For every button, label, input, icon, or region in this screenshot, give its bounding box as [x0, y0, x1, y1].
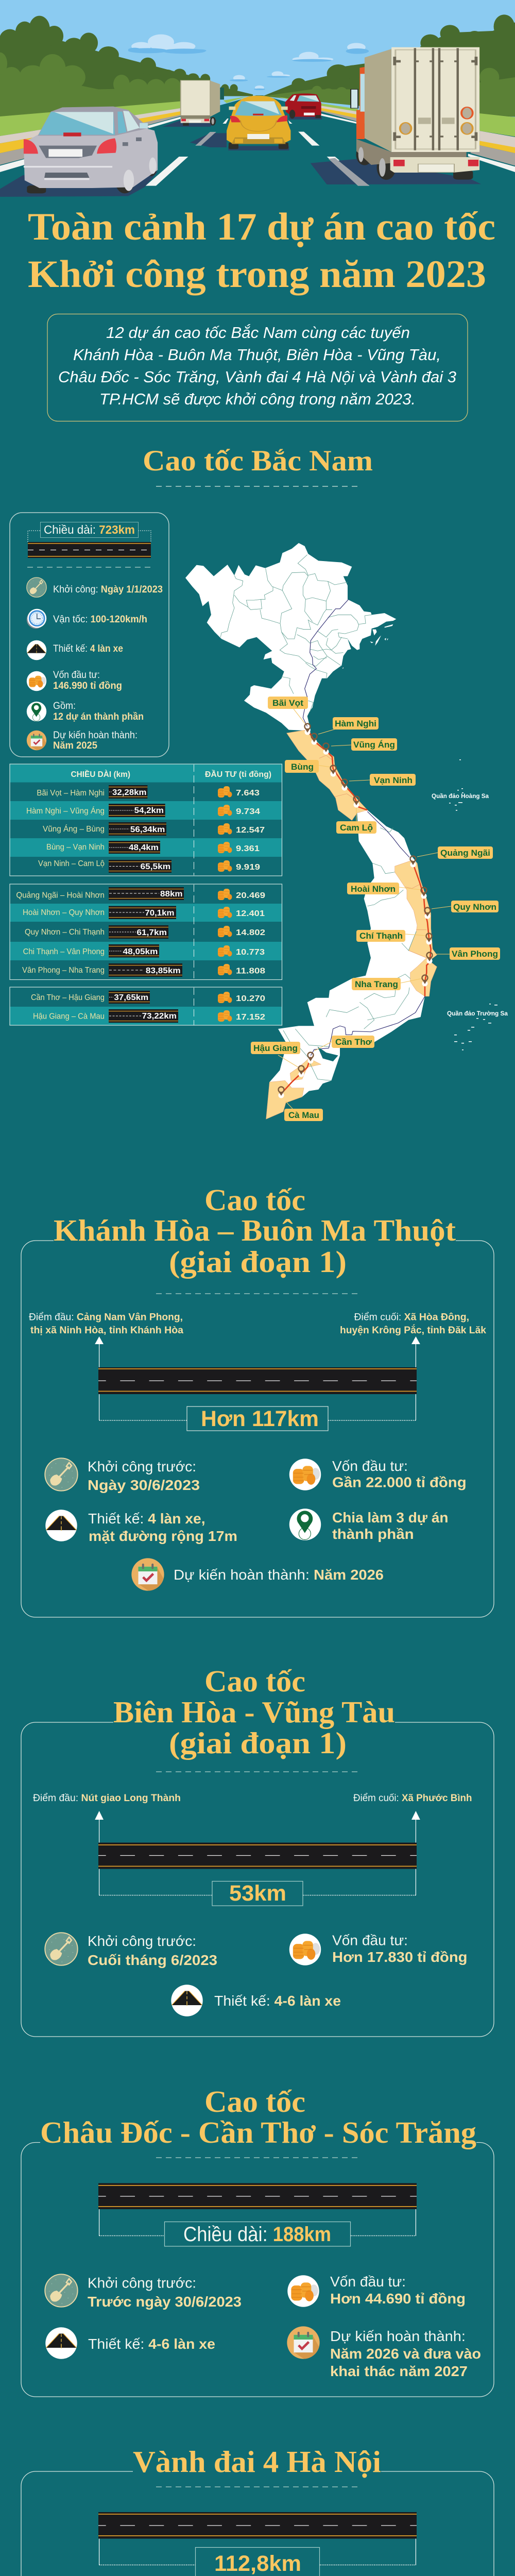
item: start: Trước ngày 30/6/2023 [88, 2294, 242, 2310]
table group 1: Vạn Ninh – Cam Lộ [38, 859, 105, 868]
dimension lines [99, 2538, 416, 2565]
item: investment [27, 670, 122, 691]
label: Quần đảo Hoàng Sa: Quần đảo Hoàng Sa [432, 792, 489, 800]
road [98, 2512, 417, 2539]
length box: Hơn 117km [201, 1406, 319, 1431]
heading: Châu Đốc - Cần Thơ - Sóc Trăng: Châu Đốc - Cần Thơ - Sóc Trăng [40, 2115, 476, 2149]
investment column: 7.643 [236, 789, 260, 798]
item: design: Thiết kế: 4 làn xe [53, 643, 123, 654]
road [98, 1367, 417, 1394]
panel: Khánh Hòa - Buôn Ma Thuột [21, 1241, 494, 1617]
arrows and dimension lines [95, 1336, 420, 1420]
map labels: Quy Nhơn [453, 902, 496, 912]
item: start [45, 1458, 200, 1493]
item: speed [27, 609, 147, 629]
item: completion [131, 1558, 384, 1591]
length bars: 56,34km [130, 825, 165, 834]
item: investment: Gần 22.000 tỉ đồng [332, 1475, 467, 1490]
big truck [351, 47, 479, 180]
road [98, 2183, 417, 2209]
map: central and south [266, 728, 437, 1119]
length label: Chiều dài: 723km [44, 523, 135, 536]
length bars: 83,85km [146, 967, 181, 975]
investment column: 9.919 [236, 863, 260, 872]
map labels: Nha Trang [355, 979, 398, 989]
panel: Châu Đốc - Cần Thơ - Sóc Trăng [21, 2142, 494, 2397]
start point: thị xã Ninh Hòa, tỉnh Khánh Hòa [30, 1325, 183, 1336]
item: design [45, 1510, 237, 1544]
item: completion: Năm 2026 và đưa vào [330, 2346, 481, 2362]
road [98, 1842, 417, 1869]
intro text box: 12 dự án cao tốc Bắc Nam cùng các tuyến [106, 324, 410, 342]
item: start: Khởi công trước: [88, 1933, 196, 1949]
table group 1: ĐẦU TƯ (tỉ đồng) [205, 769, 271, 779]
heading: Khánh Hòa - Buôn Ma Thuột [54, 1183, 456, 1279]
heading: Khánh Hòa - Buôn Ma Thuột: (giai đoạn 1) [169, 1245, 347, 1279]
map labels: Cà Mau [288, 1110, 319, 1120]
heading: Khánh Hòa - Buôn Ma Thuột: Khánh Hòa – Buôn Ma Thuột [54, 1213, 456, 1247]
item: investment [289, 1932, 468, 1965]
item: investment: Vốn đầu tư: [332, 1932, 408, 1948]
investment column: 9.361 [236, 844, 260, 853]
table group 2: Chi Thạnh – Vân Phong [23, 947, 105, 956]
title: Toàn cảnh 17 dự án cao tốc [28, 206, 495, 248]
map labels: Cam Lộ [340, 823, 373, 833]
item: start date [27, 578, 163, 597]
item: start: Cuối tháng 6/2023 [88, 1952, 217, 1968]
item: investment: 146.990 tỉ đồng [53, 681, 122, 691]
item: design [171, 1985, 341, 2016]
table group 1: Bùng – Vạn Ninh [46, 843, 105, 852]
item: investment: Vốn đầu tư: [330, 2274, 406, 2290]
item: completion: Dự kiến hoàn thành: [330, 2328, 466, 2344]
table group 2: Hoài Nhơn – Quy Nhơn [23, 908, 105, 917]
length box: 112,8km [214, 2551, 301, 2576]
item: components [27, 701, 144, 722]
yellow car [227, 96, 290, 149]
item: start date: Khởi công: Ngày 1/1/2023 [53, 584, 163, 595]
length bars: 65,5km [140, 862, 170, 871]
item: investment [289, 1458, 467, 1490]
arrows and dimension lines [95, 1811, 420, 1895]
investment column: 12.401 [236, 909, 265, 918]
length bars: 70,1km [145, 909, 174, 918]
table group 1: Bãi Vọt – Hàm Nghi [37, 789, 105, 798]
hero illustration: highway with cars [0, 0, 515, 201]
silver car [24, 107, 158, 193]
title [28, 206, 495, 296]
road graphic [28, 542, 151, 558]
panel: Bắc Nam summary [10, 513, 169, 757]
map labels: Chí Thạnh [359, 931, 403, 941]
map labels: Hậu Giang [253, 1043, 298, 1053]
table group 3: Cần Thơ – Hậu Giang [31, 993, 105, 1002]
item: design [45, 2327, 215, 2359]
item: investment [287, 2274, 466, 2307]
end point: Điểm cuối: Xã Hòa Đông, [354, 1312, 469, 1323]
heading: Châu Đốc - Cần Thơ - Sóc Trăng: Cao tốc [204, 2084, 305, 2119]
item: investment: Vốn đầu tư: [332, 1458, 408, 1474]
investment column: 10.773 [236, 948, 265, 957]
start point: Điểm đầu: Nút giao Long Thành [33, 1793, 181, 1804]
label: Quần đảo Trường Sa: Quần đảo Trường Sa [447, 1010, 508, 1017]
item: design: mặt đường rộng 17m [89, 1528, 237, 1544]
table group 1: Vũng Áng – Bùng [43, 824, 105, 834]
length box: Chiều dài: 188km [183, 2223, 331, 2246]
map labels: Vân Phong [452, 949, 498, 959]
investment column: 10.270 [236, 994, 265, 1003]
heading: Cao tốc Bắc Nam: Cao tốc Bắc Nam [143, 445, 373, 477]
item: completion: Năm 2025 [53, 740, 97, 751]
small white truck [181, 80, 224, 126]
length box [196, 2547, 319, 2576]
intro text box [47, 314, 468, 421]
intro text box: Khánh Hòa - Buôn Ma Thuột, Biên Hòa - Vũng Tàu, [73, 346, 441, 364]
map labels: Bùng [291, 762, 314, 772]
table group 3: Hậu Giang – Cà Mau [33, 1012, 105, 1021]
length bars [109, 785, 184, 1023]
intro text box: TP.HCM sẽ được khởi công trong năm 2023. [99, 390, 416, 408]
length bars: 48,05km [123, 947, 158, 956]
panel: Biên Hòa - Vũng Tàu [21, 1722, 494, 2037]
heading: Biên Hòa - Vũng Tàu [113, 1664, 395, 1760]
map labels: Bãi Vọt [272, 698, 303, 708]
item: components: Chia làm 3 dự án [332, 1510, 448, 1526]
item: speed: Vận tốc: 100-120km/h [53, 614, 147, 625]
heading: Vành đai 4 Hà Nội: Vành đai 4 Hà Nội [133, 2445, 381, 2479]
item: investment: Vốn đầu tư: [53, 670, 100, 681]
investment column: 11.808 [236, 967, 265, 976]
item: components: Gồm: [53, 701, 76, 711]
start point [29, 1312, 183, 1336]
end point [340, 1312, 486, 1336]
length bars: 32,28km [112, 788, 146, 797]
length bars: 61,7km [136, 928, 167, 937]
investment column: 20.469 [236, 891, 265, 900]
item: design [27, 640, 123, 660]
item: start: Ngày 30/6/2023 [88, 1477, 200, 1493]
table group 2: Vân Phong – Nha Trang [22, 966, 105, 975]
table group 2 [10, 884, 282, 980]
heading: Khánh Hòa - Buôn Ma Thuột: Cao tốc [204, 1183, 305, 1217]
item: start: Khởi công trước: [88, 2275, 196, 2291]
islands [449, 759, 497, 1050]
length bars: 48,4km [129, 843, 159, 852]
end point: huyện Krông Pắc, tỉnh Đăk Lăk [340, 1325, 486, 1336]
heading: Châu Đốc - Cần Thơ - Sóc Trăng [40, 2084, 476, 2149]
length bars: 88km [160, 890, 183, 899]
item: investment: Hơn 17.830 tỉ đồng [332, 1949, 468, 1965]
intro text box: Châu Đốc - Sóc Trăng, Vành đai 4 Hà Nội và Vành đai 3 [58, 368, 456, 386]
item: start [45, 2274, 242, 2310]
item: start [45, 1933, 217, 1968]
table group 3 [10, 987, 282, 1025]
length bars: 37,65km [114, 993, 148, 1002]
map: north [185, 543, 396, 731]
table group 1: CHIỀU DÀI (km) [71, 769, 130, 779]
table group 1: Hàm Nghi – Vũng Áng [26, 806, 105, 816]
heading: Biên Hòa - Vũng Tàu: Cao tốc [204, 1664, 305, 1698]
length bars: 73,22km [142, 1012, 177, 1021]
length box: 53km [229, 1881, 286, 1906]
item: design: Thiết kế: 4 làn xe, [88, 1511, 205, 1527]
item: completion: Dự kiến hoàn thành: Năm 2026 [174, 1567, 384, 1583]
dimension lines [99, 2209, 416, 2236]
item: start: Khởi công trước: [88, 1459, 196, 1475]
length box [212, 1881, 303, 1906]
table group 2: Quảng Ngãi – Hoài Nhơn [16, 891, 105, 900]
map pins and leaders [278, 709, 451, 1109]
investment column: 12.547 [236, 826, 265, 835]
item: design: Thiết kế: 4-6 làn xe [88, 2336, 215, 2352]
item: investment: Hơn 44.690 tỉ đồng [330, 2291, 466, 2307]
heading: Biên Hòa - Vũng Tàu: Biên Hòa - Vũng Tàu [113, 1695, 395, 1729]
item: design: Thiết kế: 4-6 làn xe [214, 1993, 341, 2009]
map labels: Cần Thơ [335, 1037, 372, 1047]
investment column: 14.802 [236, 928, 265, 937]
map labels: Hoài Nhơn [351, 884, 396, 894]
item: completion [27, 730, 138, 751]
panel: Vành đai 4 Hà Nội [21, 2471, 494, 2576]
table group 1 [10, 764, 282, 876]
item: completion: khai thác năm 2027 [330, 2363, 468, 2379]
item: completion [287, 2326, 481, 2379]
item: components: thành phần [332, 1526, 414, 1542]
table: segments length and investment [10, 764, 282, 1025]
map labels: Hàm Nghi [335, 719, 376, 728]
item: completion: Dự kiến hoàn thành: [53, 730, 138, 741]
start point: Điểm đầu: Cảng Nam Vân Phong, [29, 1312, 183, 1323]
item: components [289, 1509, 448, 1542]
red car [285, 93, 321, 118]
item: components: 12 dự án thành phần [53, 711, 144, 722]
map labels: Quảng Ngãi [440, 848, 490, 858]
map labels: Vạn Ninh [374, 775, 413, 785]
map labels [251, 697, 500, 1121]
end point: Điểm cuối: Xã Phước Bình [353, 1793, 472, 1804]
table group 2: Quy Nhơn – Chi Thạnh [25, 928, 105, 937]
map labels: Vũng Áng [353, 740, 395, 750]
investment column: 9.734 [236, 807, 260, 816]
title: Khởi công trong năm 2023 [28, 253, 486, 296]
investment column: 17.152 [236, 1013, 265, 1022]
heading: Biên Hòa - Vũng Tàu: (giai đoạn 1) [169, 1726, 347, 1760]
length bars: 54,2km [134, 806, 164, 815]
map of Vietnam [185, 543, 508, 1121]
investment column [218, 786, 265, 1022]
